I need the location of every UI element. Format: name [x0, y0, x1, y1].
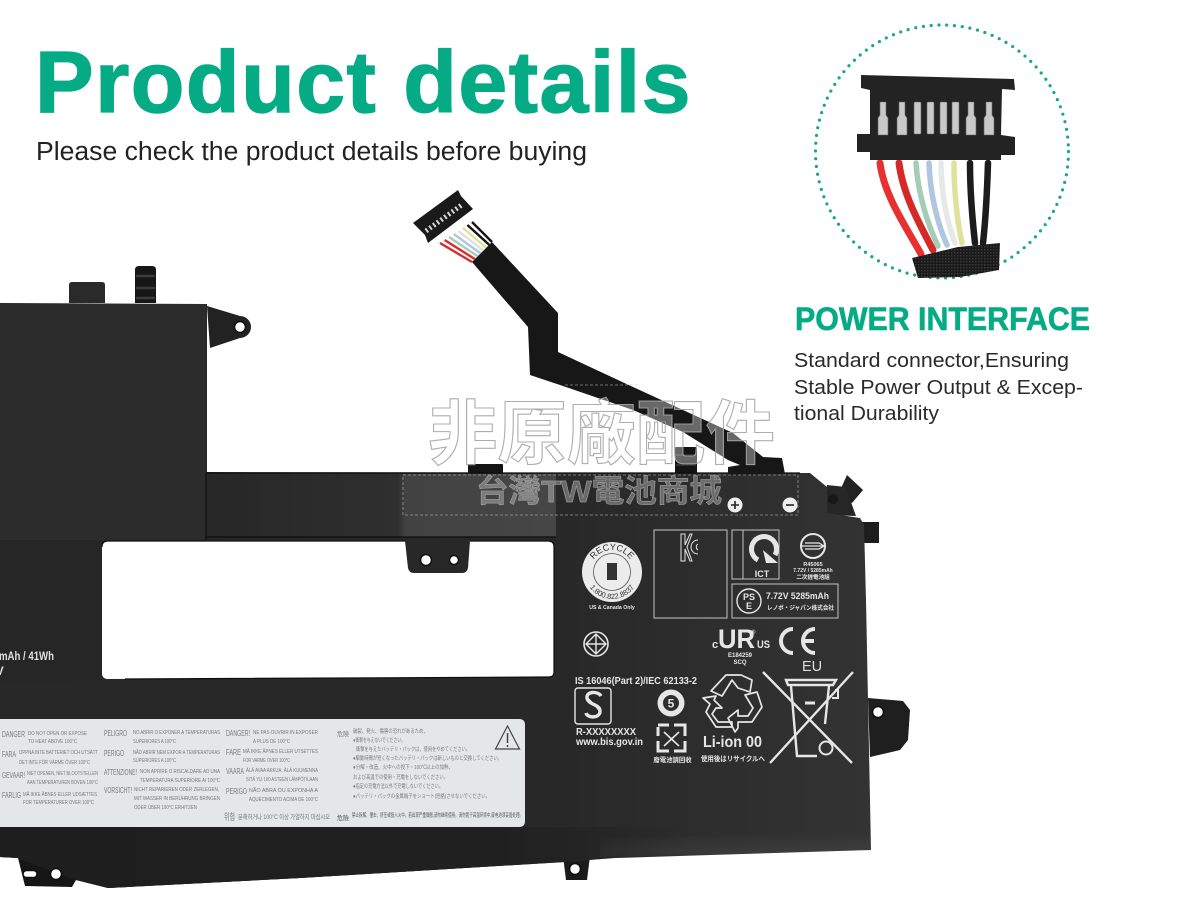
UR mark: US	[757, 639, 770, 651]
five year mark	[658, 690, 684, 716]
corner detail	[828, 494, 838, 504]
connector housing	[857, 75, 1015, 160]
Japanese warning: ●指定の充電方法以外で充電しないでください。	[353, 782, 443, 790]
battery connector wires	[440, 222, 492, 262]
warnings column three: A PLUS DE 100°C	[253, 739, 290, 745]
warnings column one: GEVAAR!	[2, 770, 25, 780]
capacity text: mAh / 41Wh	[0, 651, 54, 663]
PSE mark box: PS	[743, 592, 755, 602]
BIS text	[575, 727, 643, 748]
warnings column two: SUPERIORES A 100°C	[133, 739, 176, 745]
terminal marks	[728, 498, 798, 512]
five year mark: 5	[668, 696, 675, 710]
warnings column two: SUPERIORES A 100°C	[133, 758, 176, 764]
capacity text	[0, 651, 54, 678]
warnings column two	[104, 728, 220, 811]
BIS text: www.bis.gov.in	[575, 737, 643, 748]
warnings column three: DANGER!	[226, 728, 250, 738]
warnings column three	[226, 728, 318, 803]
warnings column one: NIET OPENEN, NIET BLOOTSTELLEN	[27, 771, 98, 777]
UR mark: c	[712, 639, 718, 651]
warnings column two: ATTENZIONE!	[104, 767, 137, 777]
standards text: IS 16046(Part 2)/IEC 62133-2	[575, 676, 697, 687]
Chinese warning	[337, 811, 523, 822]
recycle seal	[582, 542, 642, 611]
recycling arrows	[703, 675, 762, 732]
Japanese warning: 衝撃を与えたバッテリ・パックは、使用をやめてください。	[356, 745, 470, 753]
connector wires	[880, 163, 988, 254]
warnings column two: TEMPERATURA SUPERIORE AI 100°C	[140, 778, 220, 784]
left cell lower	[0, 540, 101, 720]
warnings column two: NO ABRIR O EXPONER A TEMPERATURAS	[133, 730, 220, 736]
Japanese warning: および高温での使用・充電をしないでください。	[353, 773, 448, 781]
warnings column three: PERIGO	[226, 786, 247, 796]
warnings column two: MIT WASSER IN BERÜHRUNG BRINGEN	[134, 795, 220, 802]
Korean warning: 위험	[224, 812, 235, 822]
safety mark	[793, 534, 833, 581]
battery recycling mark	[653, 725, 692, 764]
warnings column one: FOR TEMPERATURER OVER 100°C	[23, 800, 94, 806]
warnings column three: NE PAS OUVRIR IN EXPOSER	[253, 730, 318, 736]
warnings column one	[2, 729, 98, 806]
UR mark	[712, 624, 770, 666]
Japanese warning: 危険	[337, 729, 349, 738]
description text: Standard connector,Ensuring	[794, 349, 1069, 372]
warnings column one: OPPNA INTE BATTERIET OCH UTSÄTT	[19, 749, 98, 756]
warnings column one: AAN TEMPERATUREN BOVEN 100°C	[27, 780, 98, 786]
warnings column one: TO HEAT ABOVE 100°C	[28, 739, 77, 745]
warnings column two: VORSICHT!	[104, 785, 132, 795]
callout: connector close-up	[816, 25, 1068, 278]
UR mark: SCQ	[733, 660, 747, 666]
recycle seal: 1.800.822.8837	[590, 584, 633, 599]
warnings column three: SITÄ YLI 100 ASTEEN LÄMPÖTILAAN	[246, 776, 318, 783]
KC mark box	[654, 530, 727, 618]
connector pins	[878, 102, 994, 135]
recycle seal: US & Canada Only	[589, 605, 635, 611]
warnings column two: NÃO ABRIR NEM EXPOR A TEMPERATURAS	[133, 749, 220, 756]
warnings column one: MÅ IKKE ÅBNES ELLER UDSÆTTES	[23, 791, 97, 798]
UR mark: UR	[718, 624, 755, 654]
battery body	[0, 303, 871, 888]
left cell	[0, 304, 206, 540]
ICT mark box: ICT	[755, 569, 770, 579]
right cell bottom glow	[600, 832, 871, 859]
safety mark: R45065	[803, 562, 823, 568]
PSE mark box	[732, 584, 838, 618]
warnings column three: MÅ IKKE ÅPNES ELLER UTSETTES	[243, 748, 318, 755]
Japanese warning: 破裂、発火、傷害の恐れがあるため、	[353, 727, 428, 735]
strip seams	[102, 473, 800, 679]
BIS text: R-XXXXXXXX	[576, 727, 636, 738]
Korean warning	[224, 812, 330, 822]
warnings column two: ODER ÜBER 100°C ERHITZEN	[134, 804, 197, 811]
description text: tional Durability	[794, 402, 940, 425]
upper strip	[206, 474, 556, 537]
safety mark: 二次鋰電池組	[796, 573, 830, 581]
watermark	[403, 385, 798, 515]
UR mark: ®	[751, 629, 756, 636]
heading: power interface: POWER INTERFACE	[795, 301, 1090, 337]
lug holes	[23, 322, 884, 880]
CE mark	[781, 629, 815, 653]
warnings column three: FOR VARME OVER 100°C	[243, 758, 290, 764]
warnings column one: DANGER	[2, 729, 25, 739]
warnings column three: NÃO ABRA OU EXPONHA A	[249, 787, 318, 794]
warnings column one: FARA	[2, 749, 16, 759]
warnings column one: DO NOT OPEN OR EXPOSE	[28, 731, 87, 737]
ICT mark box	[732, 530, 779, 579]
WEEE crossed bin	[763, 672, 853, 763]
watermark large text: 非原廠配件	[428, 395, 775, 473]
subtitle: Please check the product details before buying	[36, 138, 587, 166]
round certification mark	[584, 632, 608, 656]
title: Product details	[35, 34, 692, 131]
watermark small text: 台灣TW電池商城	[476, 474, 722, 509]
PSE mark box: レノボ・ジャパン株式会社	[767, 604, 834, 612]
shaded band under label	[0, 827, 690, 888]
PSE mark box: 7.72V 5285mAh	[766, 591, 829, 602]
warnings column three: FARE	[226, 747, 241, 757]
watermark dashed frame	[403, 385, 798, 515]
battery recycling mark: 廢電池請回收	[653, 755, 692, 764]
recycle seal: RECYCLE	[590, 544, 635, 560]
Japanese warning	[337, 727, 502, 800]
battery tabs and lugs	[18, 266, 910, 887]
connector braid	[912, 243, 1000, 278]
warnings column one: FARLIG	[2, 790, 21, 800]
warning label	[0, 719, 525, 827]
warnings column two: PERIGO	[104, 748, 124, 758]
battery connector pins	[426, 204, 463, 231]
warnings column three: VAARA	[226, 766, 244, 776]
Chinese warning: 危險	[337, 813, 349, 822]
description text	[794, 349, 1083, 425]
warnings column two: PELIGRO	[104, 728, 127, 738]
warnings column three: AQUECIMENTO ACIMA DE 100°C	[249, 797, 318, 803]
warnings column two: NICHT REPARIEREN ODER ZERLEGEN,	[134, 787, 219, 793]
dotted circle	[816, 25, 1068, 278]
warnings column two: NON APRIRE O RISCALDARE AD UNA	[140, 769, 220, 775]
Korean warning: 분해하거나 100°C 이상 가열하지 마십시오	[238, 812, 330, 821]
PSE mark box: E	[746, 601, 752, 611]
safety mark: 7.72V / 5285mAh	[793, 568, 833, 574]
Japanese warning: ●分解・改造、火中への投下・100℃以上の加熱、	[353, 763, 453, 771]
battery photo	[0, 190, 910, 888]
lower cell	[0, 678, 566, 888]
Chinese warning: 禁止拆解、撞击、挤压或投入火中。若出现严重鼓胀,请勿继续使用。请勿置于高温环境中,废电池须妥善处理。	[352, 811, 523, 819]
BIS mark	[575, 688, 611, 724]
description text: Stable Power Output & Excep-	[794, 376, 1083, 399]
ribbon cable	[472, 242, 785, 475]
warning triangle	[496, 726, 520, 749]
Japanese warning: ●駆動時間が短くなったバッテリ・パックは新しいものと交換してください。	[353, 754, 502, 762]
warnings column three: ÄLÄ AVAA AKKUA, ÄLÄ KUUMENNA	[246, 767, 318, 774]
EU label: EU	[802, 659, 822, 675]
Japanese warning: ●衝撃を与えないでください。	[353, 736, 405, 744]
battery connector	[413, 190, 473, 243]
UR mark: E184259	[728, 653, 753, 659]
Japanese recycling note: 使用後はリサイクルへ	[701, 754, 765, 763]
Japanese warning: ●バッテリ・パックの金属端子をショート(短絡)させないでください。	[353, 792, 490, 800]
Li-ion label: Li-ion 00	[703, 734, 762, 751]
warnings column one: DET INTE FÖR VÄRME ÖVER 100°C	[19, 759, 90, 766]
